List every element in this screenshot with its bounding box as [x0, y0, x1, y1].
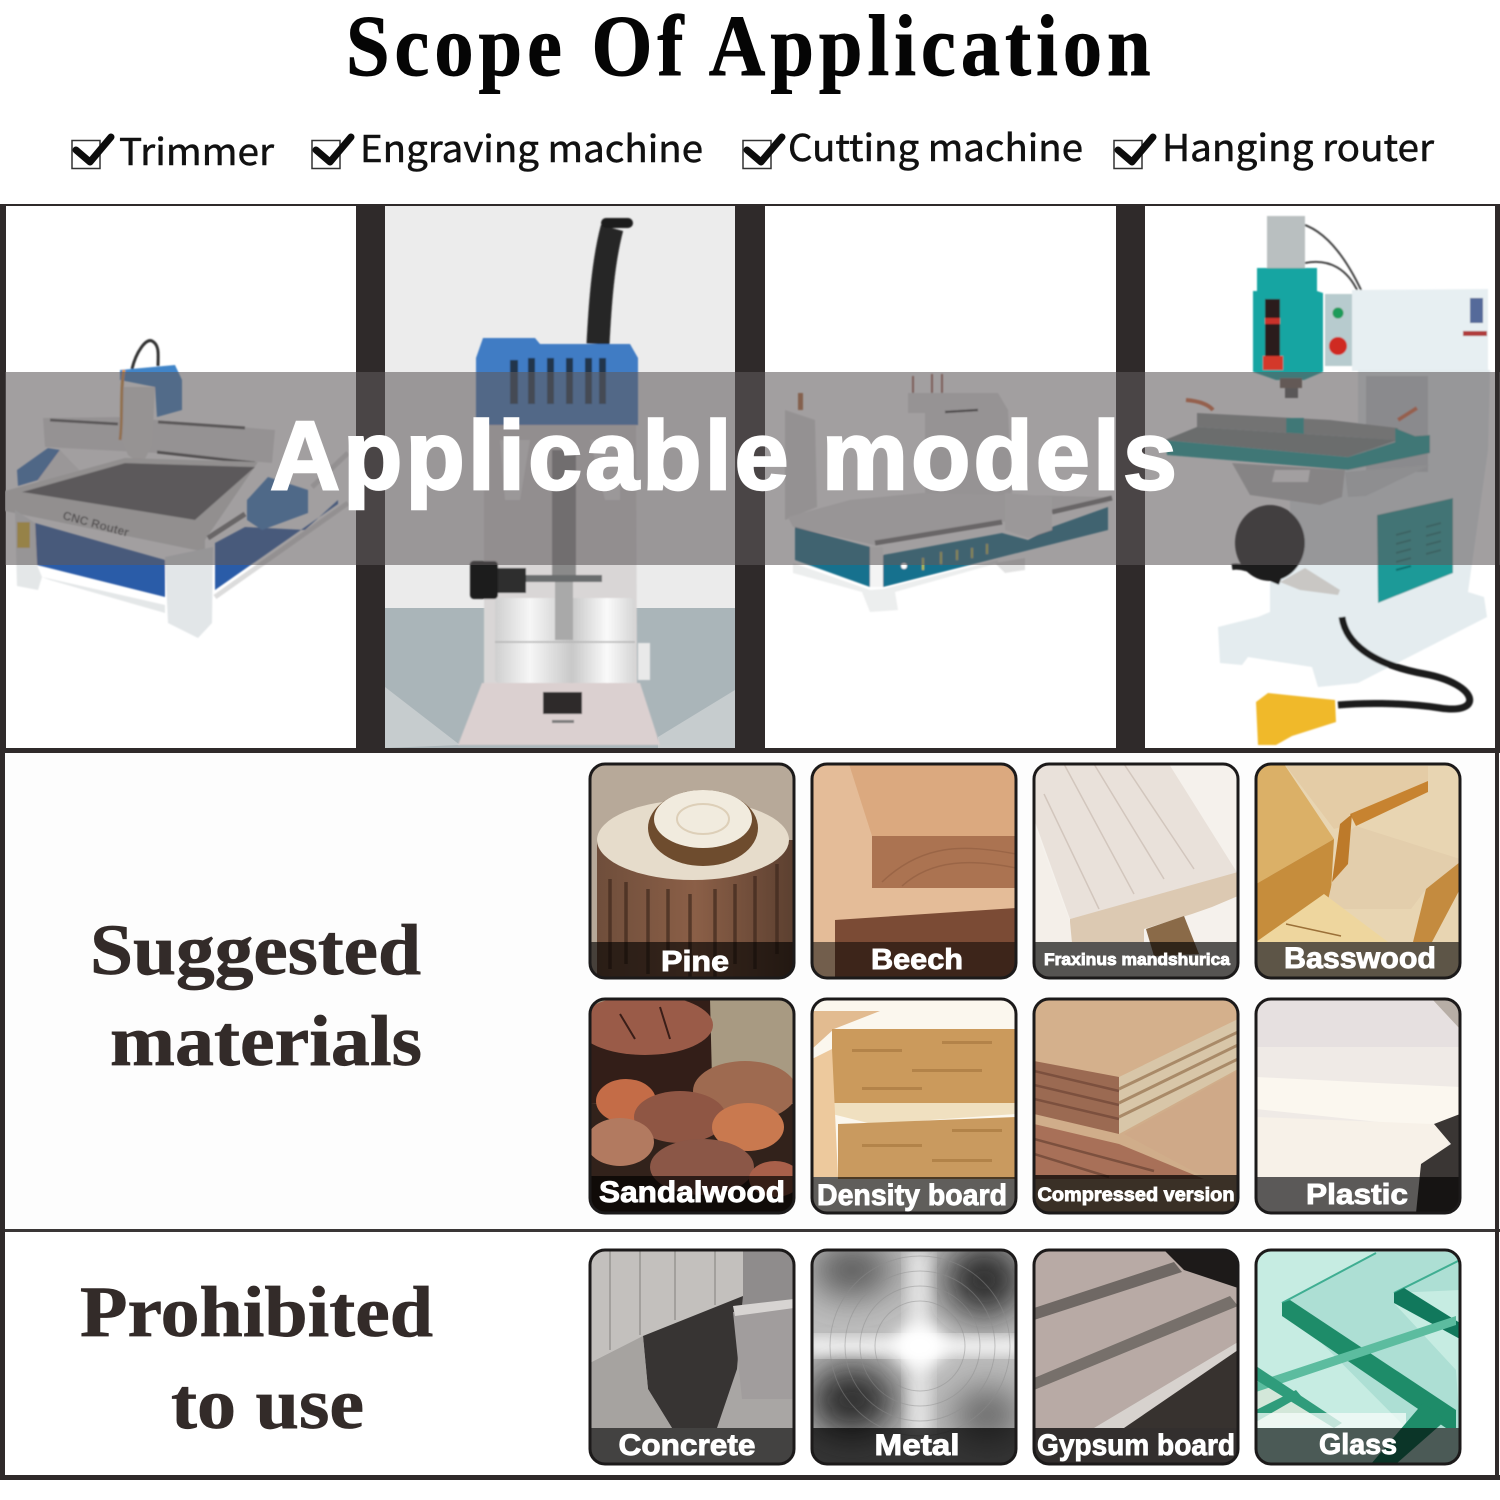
tile: Basswood — [1256, 764, 1460, 978]
tile: Beech — [812, 764, 1016, 978]
title: Scope Of Application — [346, 0, 1151, 94]
machine: gantry cutting machine — [785, 374, 1112, 612]
option: Hanging router: Hanging router — [1162, 118, 1435, 172]
checklist of machine types — [72, 118, 1435, 176]
tile: Gypsum board — [1034, 1250, 1238, 1464]
tile: Plastic: Plastic — [1306, 1179, 1408, 1211]
tile: Density board — [812, 999, 1016, 1213]
heading: prohibited to use: Prohibited — [80, 1272, 433, 1352]
tile: Beech: Beech — [871, 944, 963, 976]
panel: applicable models — [0, 204, 1500, 753]
tile: Density board: Density board — [817, 1179, 1007, 1212]
panel background dark frame — [0, 204, 1500, 753]
tile: Basswood: Basswood — [1284, 942, 1436, 975]
heading: suggested materials — [90, 910, 422, 1081]
tile: Concrete: Concrete — [618, 1429, 756, 1462]
option: Engraving machine: Engraving machine — [360, 119, 703, 173]
tile: Pine: Pine — [661, 946, 729, 978]
machine panel backgrounds — [6, 206, 1495, 748]
heading: prohibited to use: to use — [171, 1364, 364, 1444]
band heading: Applicable models — [270, 401, 1177, 510]
tile: Plastic — [1256, 999, 1460, 1213]
tile: Sandalwood: Sandalwood — [599, 1176, 785, 1209]
tile: Gypsum board: Gypsum board — [1037, 1429, 1235, 1462]
option: Cutting machine: Cutting machine — [788, 118, 1083, 172]
machine: blue CNC router: CNC Router — [61, 508, 131, 540]
tile: Glass: Glass — [1319, 1429, 1397, 1461]
heading: suggested materials: Suggested — [90, 910, 421, 990]
tile: Metal: Metal — [874, 1429, 960, 1462]
panel: prohibited to use — [0, 1229, 1500, 1464]
tile: Metal — [802, 1242, 1026, 1464]
tile: Sandalwood — [577, 995, 801, 1213]
tile: Glass — [1256, 1250, 1460, 1464]
tile: Fraxinus mandshurica: Fraxinus mandshurica — [1044, 950, 1231, 969]
tile: Compressed version: Compressed version — [1038, 1185, 1234, 1206]
option: Trimmer: Trimmer — [119, 122, 275, 176]
panel: suggested materials — [94, 762, 1462, 1214]
machine: hand trimmer — [385, 218, 735, 748]
tile: Compressed version — [1034, 999, 1238, 1213]
translucent title band — [0, 372, 1500, 565]
tile: Concrete — [590, 1250, 794, 1464]
machine: blue CNC router — [5, 341, 348, 638]
heading: prohibited to use — [80, 1272, 433, 1444]
panel background — [0, 753, 1500, 1231]
heading: suggested materials: materials — [110, 1001, 422, 1081]
tile: Pine — [590, 764, 794, 978]
divider and panel background — [0, 1229, 1500, 1232]
machine: spindle moulder — [1165, 216, 1490, 745]
tile: Fraxinus mandshurica — [1034, 764, 1238, 978]
